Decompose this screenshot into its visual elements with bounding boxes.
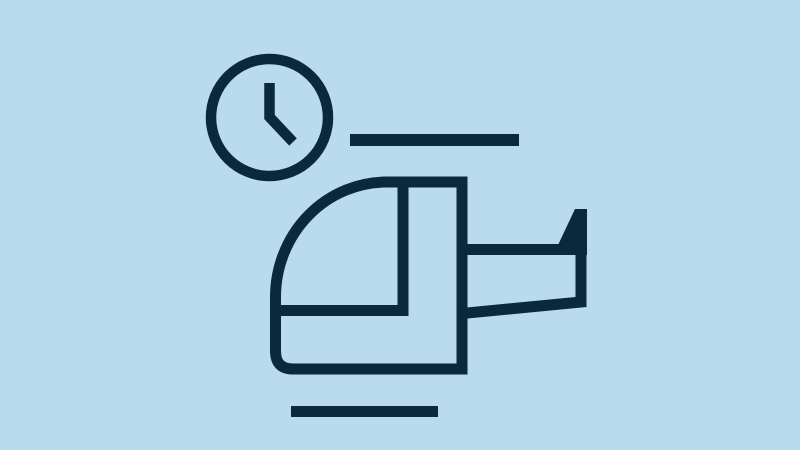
rotor line (350, 134, 519, 146)
icon: clock (211, 59, 328, 176)
tail fin (558, 209, 587, 255)
skid line (291, 406, 438, 417)
helicopter body (276, 182, 581, 369)
